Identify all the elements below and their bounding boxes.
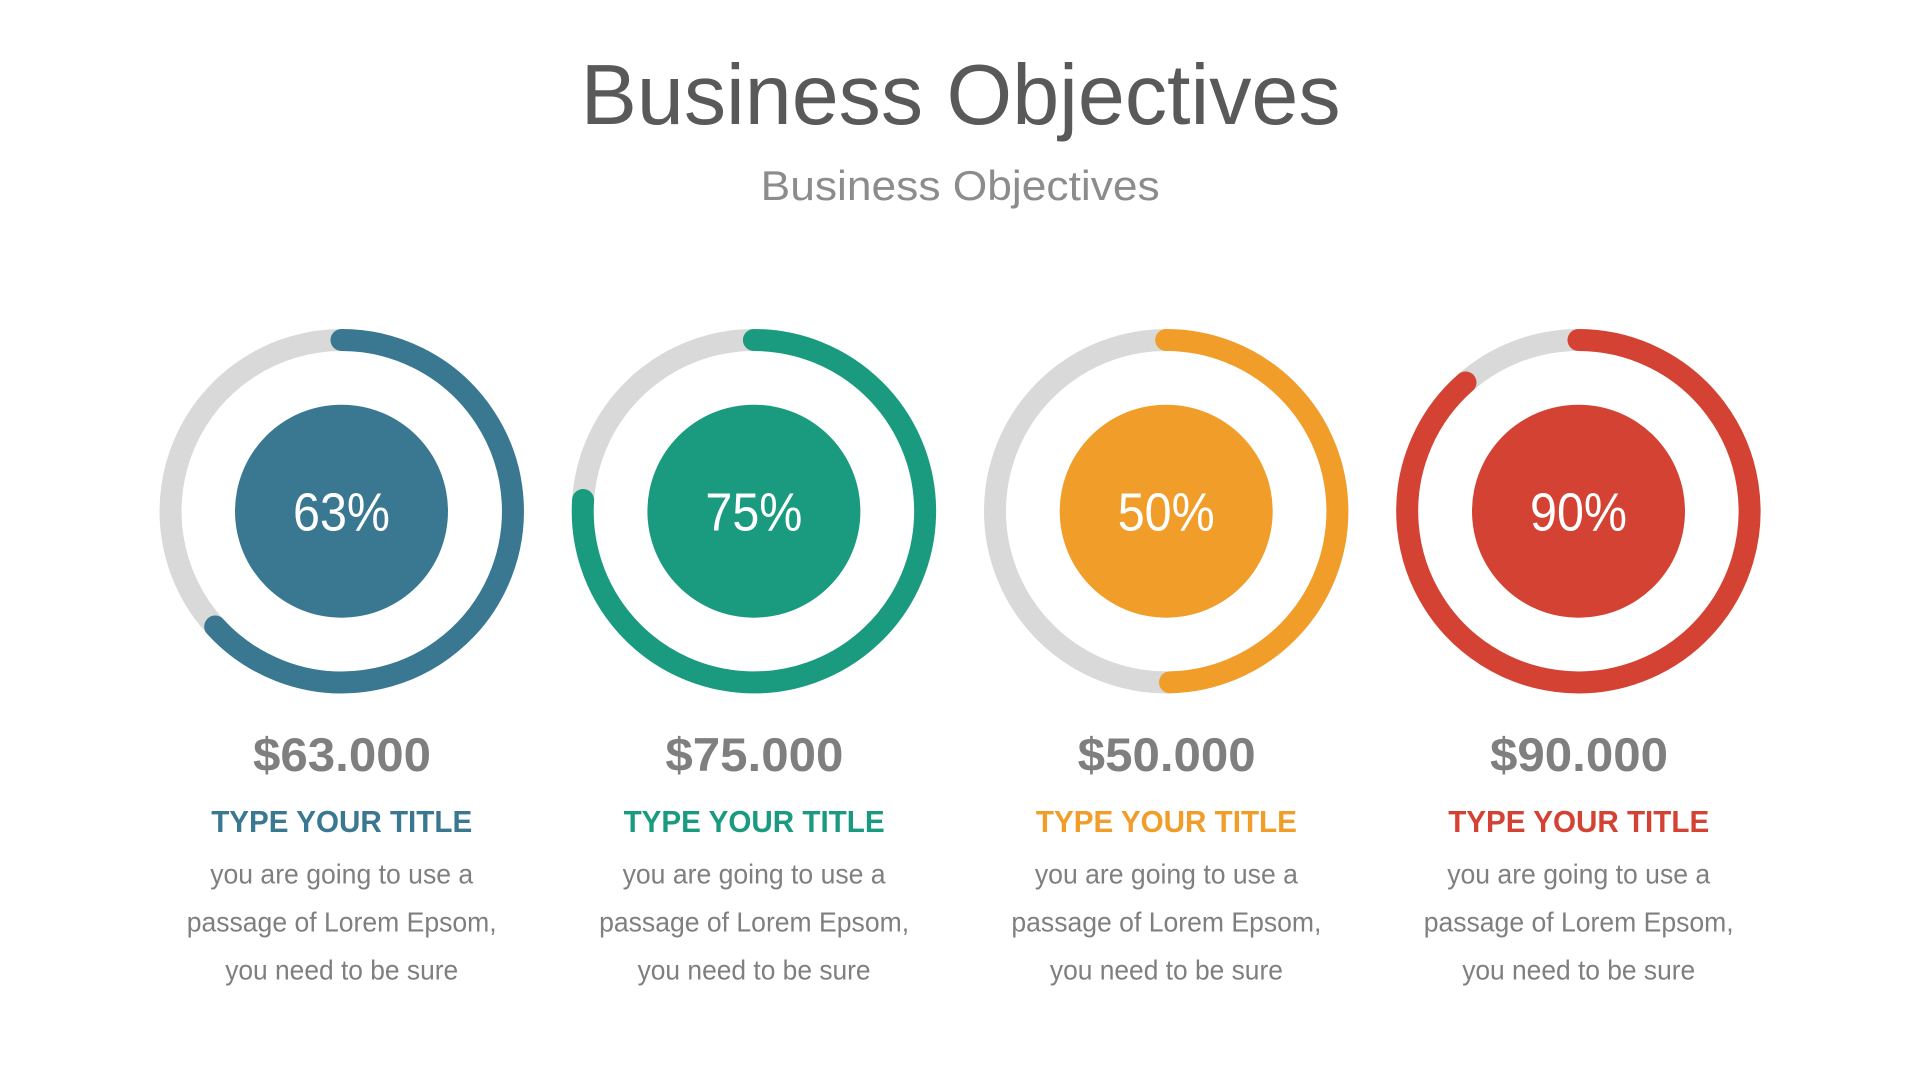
panel: objective 75% — [583, 340, 925, 985]
subtitle: Business Objectives — [761, 162, 1160, 209]
donut gauge: 90%: 90% — [1530, 482, 1627, 542]
heading: TYPE YOUR TITLE — [624, 804, 885, 839]
donut gauge: 75% — [583, 340, 925, 682]
heading: TYPE YOUR TITLE — [211, 804, 472, 839]
panel: objective 90% — [1407, 340, 1750, 985]
amount: $50.000 — [1078, 728, 1256, 781]
amount: $63.000 — [253, 728, 431, 781]
heading: TYPE YOUR TITLE — [1036, 804, 1297, 839]
description: passage of Lorem Epsom, — [187, 906, 497, 938]
donut gauge: 50% — [995, 340, 1337, 682]
description: passage of Lorem Epsom, — [599, 906, 909, 938]
description: you are going to use a — [1447, 858, 1711, 890]
amount: $75.000 — [665, 728, 843, 781]
description: you need to be sure — [1050, 954, 1283, 986]
description: you are going to use a — [1035, 858, 1298, 890]
description — [1011, 858, 1321, 986]
description: passage of Lorem Epsom, — [1424, 906, 1734, 938]
description: you need to be sure — [638, 954, 871, 986]
description: you are going to use a — [210, 858, 474, 890]
description: you need to be sure — [225, 954, 458, 986]
heading: TYPE YOUR TITLE — [1448, 804, 1709, 839]
description — [1424, 858, 1734, 986]
description — [187, 858, 497, 986]
panel: objective 63% — [171, 340, 513, 986]
description: passage of Lorem Epsom, — [1011, 906, 1321, 938]
donut gauge: 75%: 75% — [705, 482, 802, 542]
donut gauge: 50%: 50% — [1118, 482, 1215, 542]
title: Business Objectives — [581, 48, 1341, 143]
description: you need to be sure — [1462, 954, 1695, 986]
panel: objective 50% — [995, 340, 1337, 986]
description — [599, 858, 909, 986]
donut gauge: 90% — [1407, 340, 1750, 682]
description: you are going to use a — [623, 858, 886, 890]
donut gauge: 63%: 63% — [293, 482, 390, 542]
amount: $90.000 — [1490, 728, 1668, 781]
donut gauge: 63% — [171, 340, 513, 682]
